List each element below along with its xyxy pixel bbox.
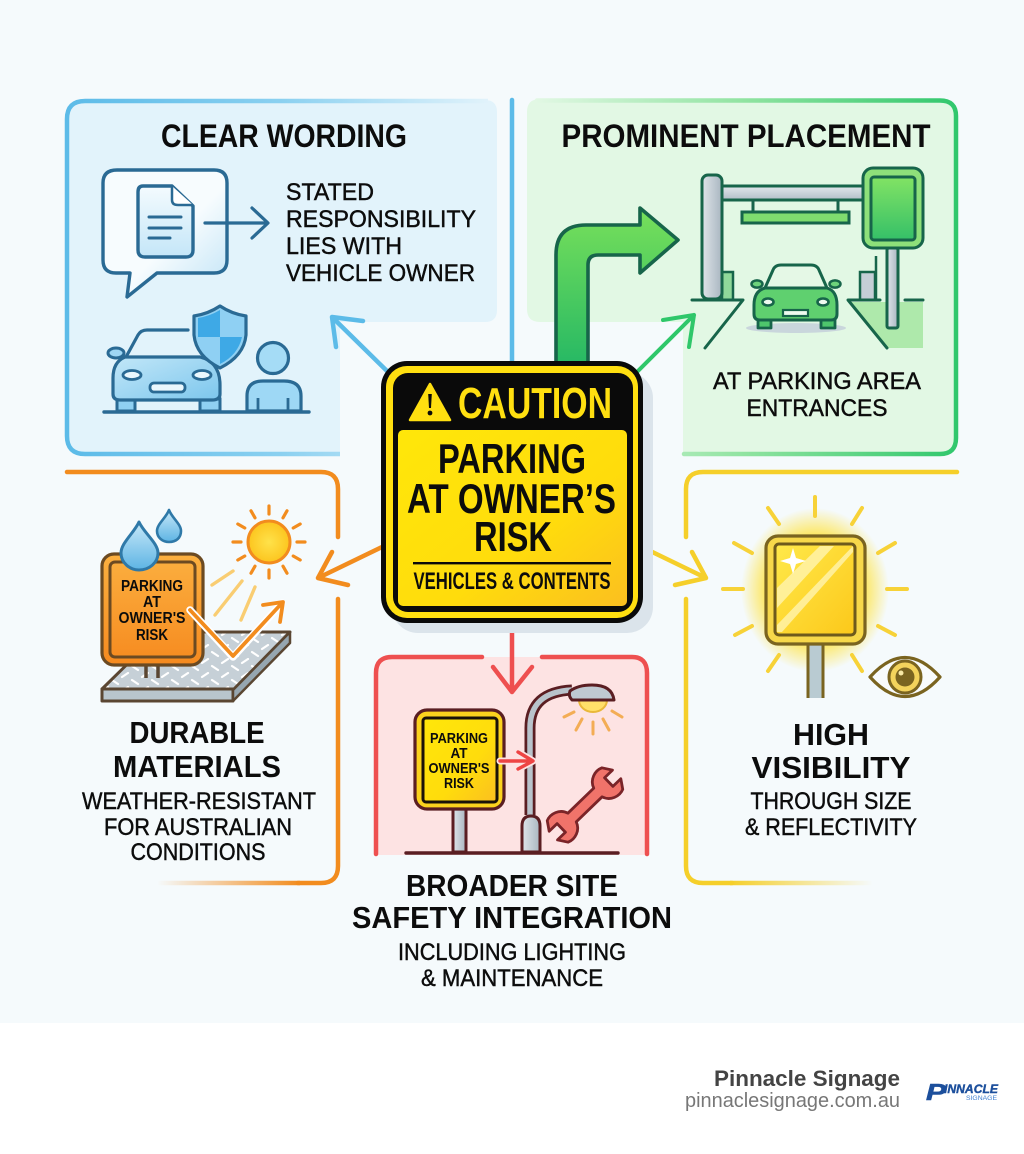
text: through size and reflectivity — [745, 788, 917, 841]
panel: prominent placement — [527, 99, 958, 456]
icon: large green turn arrow — [556, 208, 678, 364]
text: at parking area entrances: AT PARKING AREA — [713, 368, 921, 395]
heading: durable materials: MATERIALS — [113, 749, 281, 784]
icon: sign and street lamp with wrench — [406, 685, 628, 853]
heading: high visibility: VISIBILITY — [752, 750, 911, 785]
text: stated responsibility: STATED — [286, 179, 374, 206]
sign message: parking at owner's risk: PARKING — [438, 435, 586, 482]
icon: sign and street lamp with wrench: AT — [450, 745, 468, 762]
icon: weathered sign on metal plate with sun and rain: OWNER'S — [118, 610, 186, 627]
heading: broader site safety integration: BROADER SITE — [406, 868, 618, 903]
text: weather-resistant — [82, 788, 316, 866]
arrow: document to statement — [205, 208, 268, 238]
icon: warning triangle — [410, 384, 450, 420]
footer: logo — [926, 1079, 999, 1105]
arrow: to durable materials — [318, 547, 382, 585]
text: at parking area entrances — [713, 368, 921, 422]
sign footer: vehicles and contents: VEHICLES & CONTENTS — [414, 568, 610, 595]
arrow: to broader site safety — [493, 620, 532, 692]
arrow: to high visibility — [642, 547, 706, 585]
sign message: parking at owner's risk: RISK — [474, 513, 552, 560]
icon: sign and street lamp with wrench: PARKING — [430, 730, 488, 747]
icon: weathered sign on metal plate with sun and rain: AT — [143, 594, 161, 611]
heading: high visibility — [752, 717, 911, 785]
text: stated responsibility: LIES WITH — [286, 233, 402, 260]
icon: parking entrance gantry with car — [692, 168, 923, 348]
sign message: parking at owner's risk — [407, 435, 616, 560]
text: including lighting and maintenance: & MAINTENANCE — [421, 965, 603, 992]
heading: durable materials — [113, 715, 281, 784]
panel: broader site safety integration — [352, 657, 672, 992]
text: weather-resistant: WEATHER-RESISTANT — [82, 788, 316, 815]
text: stated responsibility — [286, 179, 476, 287]
text: including lighting and maintenance: INCLUDING LIGHTING — [398, 939, 626, 966]
arrow: to clear wording — [332, 317, 388, 372]
icon: weathered sign on metal plate with sun and rain: RISK — [136, 627, 168, 644]
footer: logo: P — [926, 1079, 947, 1105]
footer: brand name and website: Pinnacle Signage — [714, 1066, 900, 1091]
icon: sign and street lamp with wrench: OWNER'S — [428, 760, 490, 777]
icon: glowing reflective sign with eye — [723, 497, 940, 698]
text: at parking area entrances: ENTRANCES — [746, 395, 888, 422]
heading: broader site safety integration: SAFETY INTEGRATION — [352, 900, 672, 935]
heading: high visibility: HIGH — [793, 717, 869, 752]
heading: durable materials: DURABLE — [130, 715, 264, 750]
icon: car with shield and person — [104, 306, 309, 412]
sign message: parking at owner's risk: AT OWNER’S — [407, 475, 616, 522]
icon: weathered sign on metal plate with sun and rain — [102, 506, 305, 701]
panel: clear wording — [67, 100, 497, 455]
footer: logo: SIGNAGE — [966, 1095, 998, 1102]
text: stated responsibility: RESPONSIBILITY — [286, 206, 476, 233]
arrow: to prominent placement — [636, 315, 694, 373]
text: stated responsibility: VEHICLE OWNER — [286, 260, 475, 287]
text: including lighting and maintenance — [398, 939, 626, 992]
footer: logo: INNACLE — [944, 1082, 999, 1096]
sign heading: caution: CAUTION — [458, 379, 612, 428]
heading: prominent placement: PROMINENT PLACEMENT — [562, 118, 931, 154]
footer: brand name and website — [685, 1066, 900, 1112]
divider: blue vertical line — [510, 100, 514, 365]
central caution sign — [381, 361, 653, 633]
icon: sign and street lamp with wrench: RISK — [444, 775, 474, 792]
text: through size and reflectivity: & REFLECTIVITY — [745, 814, 917, 841]
text: weather-resistant: CONDITIONS — [130, 839, 266, 866]
footer: brand name and website: pinnaclesignage.com.au — [685, 1090, 900, 1112]
icon: weathered sign on metal plate with sun and rain: PARKING — [121, 578, 183, 595]
text: weather-resistant: FOR AUSTRALIAN — [104, 814, 292, 841]
heading: broader site safety integration — [352, 868, 672, 935]
panel: durable materials — [67, 472, 338, 883]
heading: clear wording: CLEAR WORDING — [161, 118, 407, 154]
panel: high visibility — [686, 472, 957, 883]
text: through size and reflectivity: THROUGH SIZE — [750, 788, 912, 815]
icon: speech bubble with document — [103, 170, 227, 297]
